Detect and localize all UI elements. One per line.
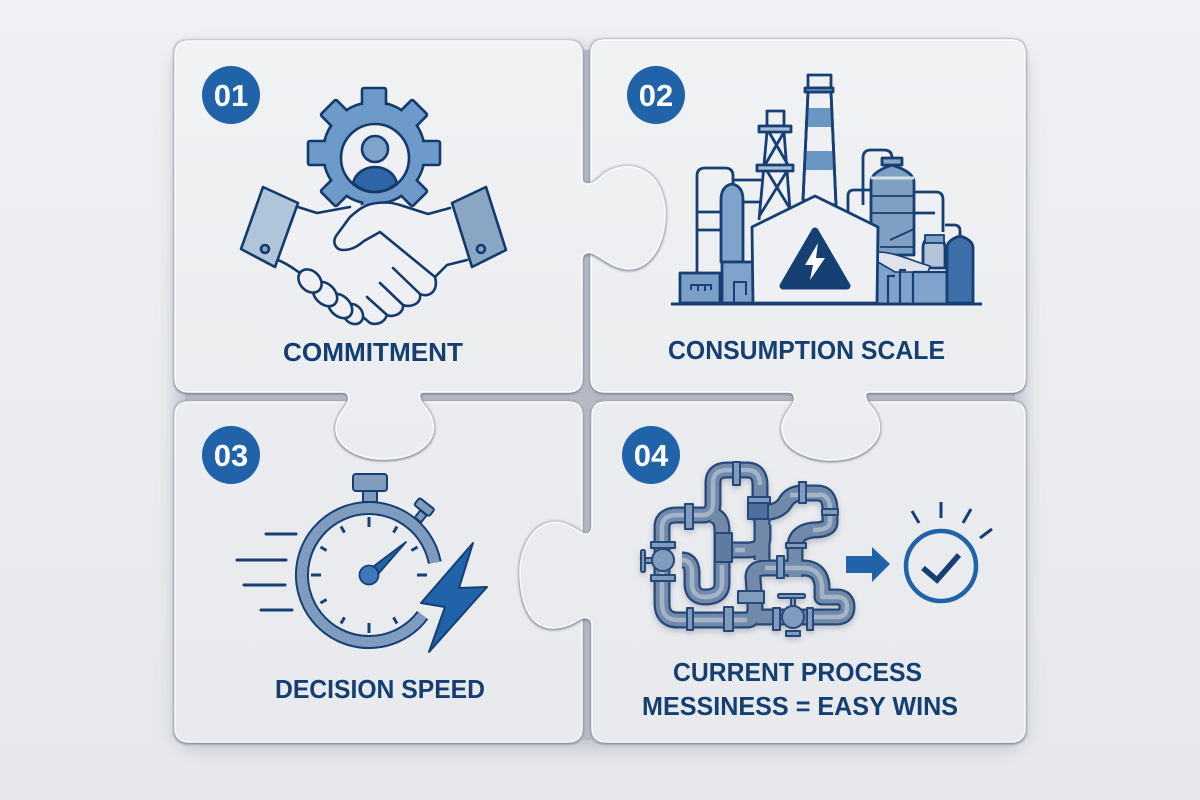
badge 01 [202,66,260,124]
stopwatch ring [302,508,435,642]
pipework left [697,168,762,272]
clock ticks [311,517,427,633]
speed lines [237,534,296,610]
icon: industrial plant with power symbol [671,75,982,304]
arrow [846,547,890,582]
label: current process messiness equals easy wins: MESSINESS = EASY WINS [642,691,958,721]
right dark tank [947,236,973,303]
badge 04 [622,426,680,484]
label: consumption scale: CONSUMPTION SCALE [668,335,945,365]
small buildings left [680,262,753,303]
small dome tank [923,235,945,268]
label: current process messiness equals easy wins: CURRENT PROCESS [673,657,922,687]
flanges and valves [641,462,838,636]
icon: handshake [241,187,506,328]
needle [360,542,406,584]
lightning bolt [421,543,487,652]
oil derrick [757,111,793,220]
left tower [721,184,743,262]
badge 01: 01 [214,78,248,113]
building with warning sign [752,196,878,303]
label: decision speed: DECISION SPEED [275,674,485,704]
stopwatch crown [353,474,435,522]
badge 03: 03 [214,438,248,473]
pipe bodies [662,470,847,620]
pipework right [848,150,960,238]
label: current process messiness equals easy wins [642,657,958,721]
panel: piece 02 consumption scale [591,40,1025,460]
chimney [803,75,836,205]
icon: tangled pipes [641,462,847,636]
label: commitment: COMMITMENT [283,337,463,367]
lower block [877,252,947,303]
panel: piece 04 process messiness [520,402,1025,742]
icon: gear with person and handshake [241,88,506,328]
badge 02: 02 [639,78,673,113]
ground line [671,302,982,306]
badge 02 [627,66,685,124]
pipe outlines [662,470,847,620]
tall process tank [871,158,914,255]
badge 04: 04 [634,438,669,473]
panel: piece 03 decision speed [175,402,582,742]
pipe highlights [662,470,847,620]
icon: check circle with rays [906,502,992,601]
badge 03 [202,426,260,484]
icon: gear with person [308,88,440,218]
panel: piece 01 commitment [175,41,665,459]
icon: stopwatch with lightning bolt [237,474,487,652]
